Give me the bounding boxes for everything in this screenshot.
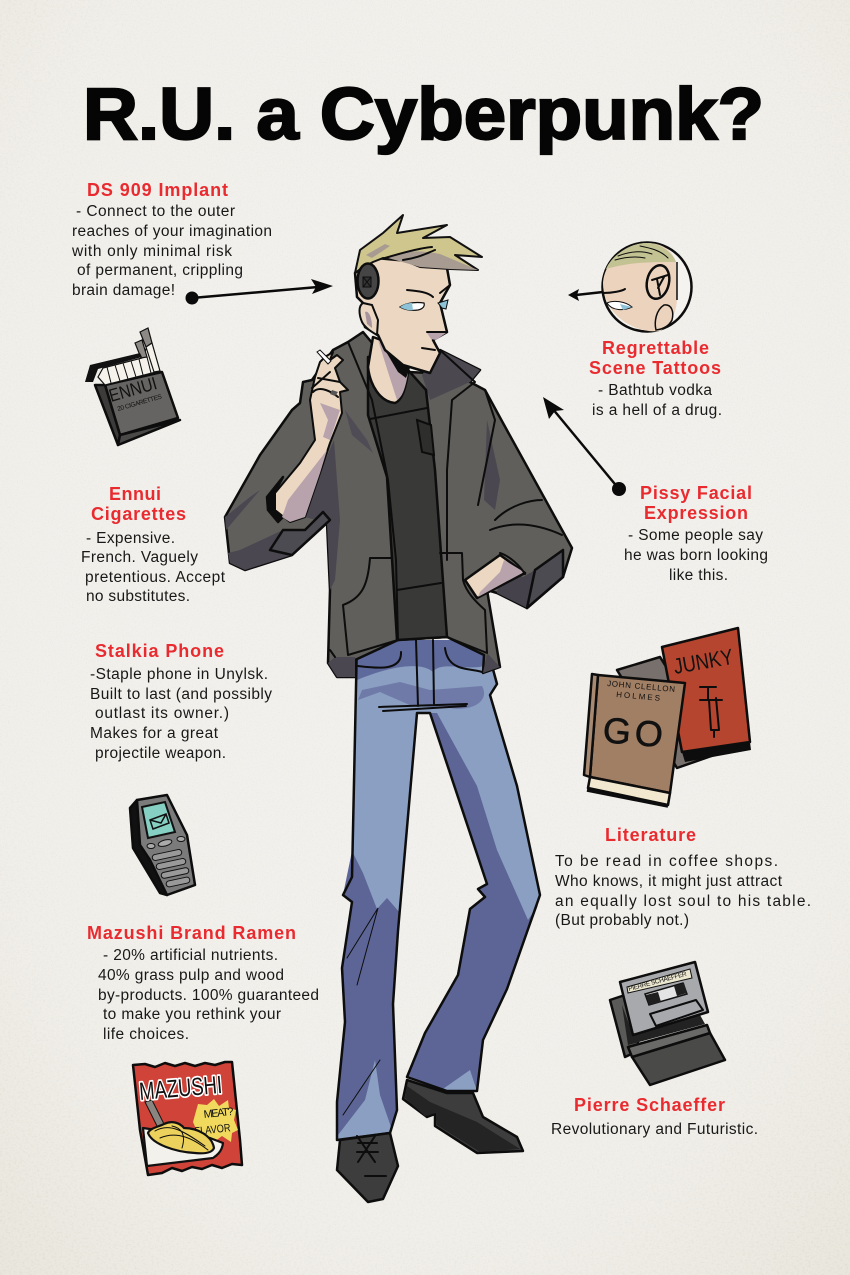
icon: cigarette pack (85, 328, 180, 445)
jacket details (270, 342, 563, 657)
right hand in pocket (465, 553, 525, 598)
callout: Literature (555, 825, 811, 929)
heading: Stalkia Phone (95, 641, 224, 661)
illustration: cyberpunk character (225, 215, 572, 1202)
callout: Pierre Schaeffer (551, 1095, 758, 1138)
callout: Ennui Cigarettes (81, 484, 226, 605)
description: like this. (669, 567, 728, 584)
description: life choices. (103, 1026, 189, 1043)
description: pretentious. Accept (85, 569, 226, 586)
description: - Expensive. (86, 530, 175, 547)
arrow: tattoo (568, 289, 603, 301)
description: Built to last (and possibly (90, 686, 272, 703)
hair (355, 215, 482, 273)
arrow: implant (186, 279, 333, 304)
callout: Regrettable Scene Tattoos (589, 338, 722, 419)
description (592, 382, 722, 419)
heading: Pissy Facial (640, 483, 752, 503)
description: French. Vaguely (81, 549, 198, 566)
heading: Expression (644, 503, 748, 523)
heading: Pierre Schaeffer (574, 1095, 725, 1115)
heading (589, 338, 721, 378)
description: - 20% artificial nutrients. (103, 947, 278, 964)
description: (But probably not.) (555, 912, 689, 929)
description (624, 527, 768, 584)
heading: Scene Tattoos (589, 358, 721, 378)
title: R.U. a Cyberpunk? (83, 74, 764, 155)
description: he was born looking (624, 547, 768, 564)
callout: Pissy Facial Expression (624, 483, 768, 584)
jacket body (225, 332, 572, 677)
description: outlast its owner.) (95, 705, 229, 722)
description: - Bathtub vodka (598, 382, 712, 399)
heading (91, 484, 186, 524)
left cuff flap (270, 512, 330, 555)
t-shirt (368, 357, 447, 640)
icon: cassette: PIERRE SCHAEFFER (628, 971, 688, 993)
description: by-products. 100% guaranteed (98, 987, 319, 1004)
description: brain damage! (72, 282, 175, 299)
callout: Mazushi Brand Ramen (87, 923, 319, 1043)
description: 40% grass pulp and wood (98, 967, 284, 984)
description: Who knows, it might just attract (555, 873, 783, 890)
description: reaches of your imagination (72, 223, 272, 240)
neck and head (355, 215, 482, 403)
heading: Mazushi Brand Ramen (87, 923, 296, 943)
icon: cigarette pack: 20 CIGARETTES (117, 393, 163, 413)
icon: books: GO (601, 709, 665, 755)
icon: cigarette pack: ENNUI (107, 373, 159, 406)
description (555, 853, 811, 929)
description (71, 203, 272, 299)
callout: Stalkia Phone (90, 641, 272, 762)
icon: ramen packet: MEAT? (203, 1106, 234, 1121)
callout: DS 909 Implant (71, 180, 272, 299)
description (98, 947, 319, 1043)
heading: DS 909 Implant (87, 180, 228, 200)
icon: phone (130, 795, 195, 895)
icon: books: JUNKY (672, 644, 735, 679)
description: is a hell of a drug. (592, 402, 722, 419)
description: projectile weapon. (95, 745, 226, 762)
description (81, 530, 226, 605)
icon: tattoo close-up (602, 242, 692, 332)
description: Revolutionary and Futuristic. (551, 1121, 758, 1138)
heading (640, 483, 752, 523)
description: no substitutes. (86, 588, 190, 605)
heading: Ennui (109, 484, 161, 504)
icon: ramen packet (133, 1062, 242, 1175)
jeans (337, 640, 540, 1140)
description: To be read in coffee shops. (555, 853, 778, 870)
description: Makes for a great (90, 725, 219, 742)
description (90, 666, 272, 762)
icon: books: JOHN CLELLON (607, 679, 676, 694)
heading: Regrettable (602, 338, 709, 358)
icon: ramen packet: MAZUSHI (138, 1071, 223, 1106)
description: to make you rethink your (103, 1006, 281, 1023)
right cuff flap (527, 550, 563, 608)
description: -Staple phone in Unylsk. (90, 666, 268, 683)
raised hand with cigarette (267, 350, 348, 522)
heading: Literature (605, 825, 696, 845)
icon: books (584, 628, 751, 806)
description: of permanent, crippling (77, 262, 243, 279)
description: - Some people say (628, 527, 763, 544)
face (400, 285, 450, 310)
icon: ramen packet: FLAVOR (194, 1122, 231, 1138)
description: with only minimal risk (71, 243, 232, 260)
description: an equally lost soul to his table. (555, 893, 811, 910)
icon: cassette (610, 962, 725, 1085)
arrow: facial expression (543, 397, 626, 496)
icon: books: HOLMES (616, 690, 660, 703)
shoes (337, 1080, 523, 1202)
heading: Cigarettes (91, 504, 186, 524)
jacket shadows (225, 350, 535, 677)
description: - Connect to the outer (76, 203, 235, 220)
implant (358, 264, 378, 298)
